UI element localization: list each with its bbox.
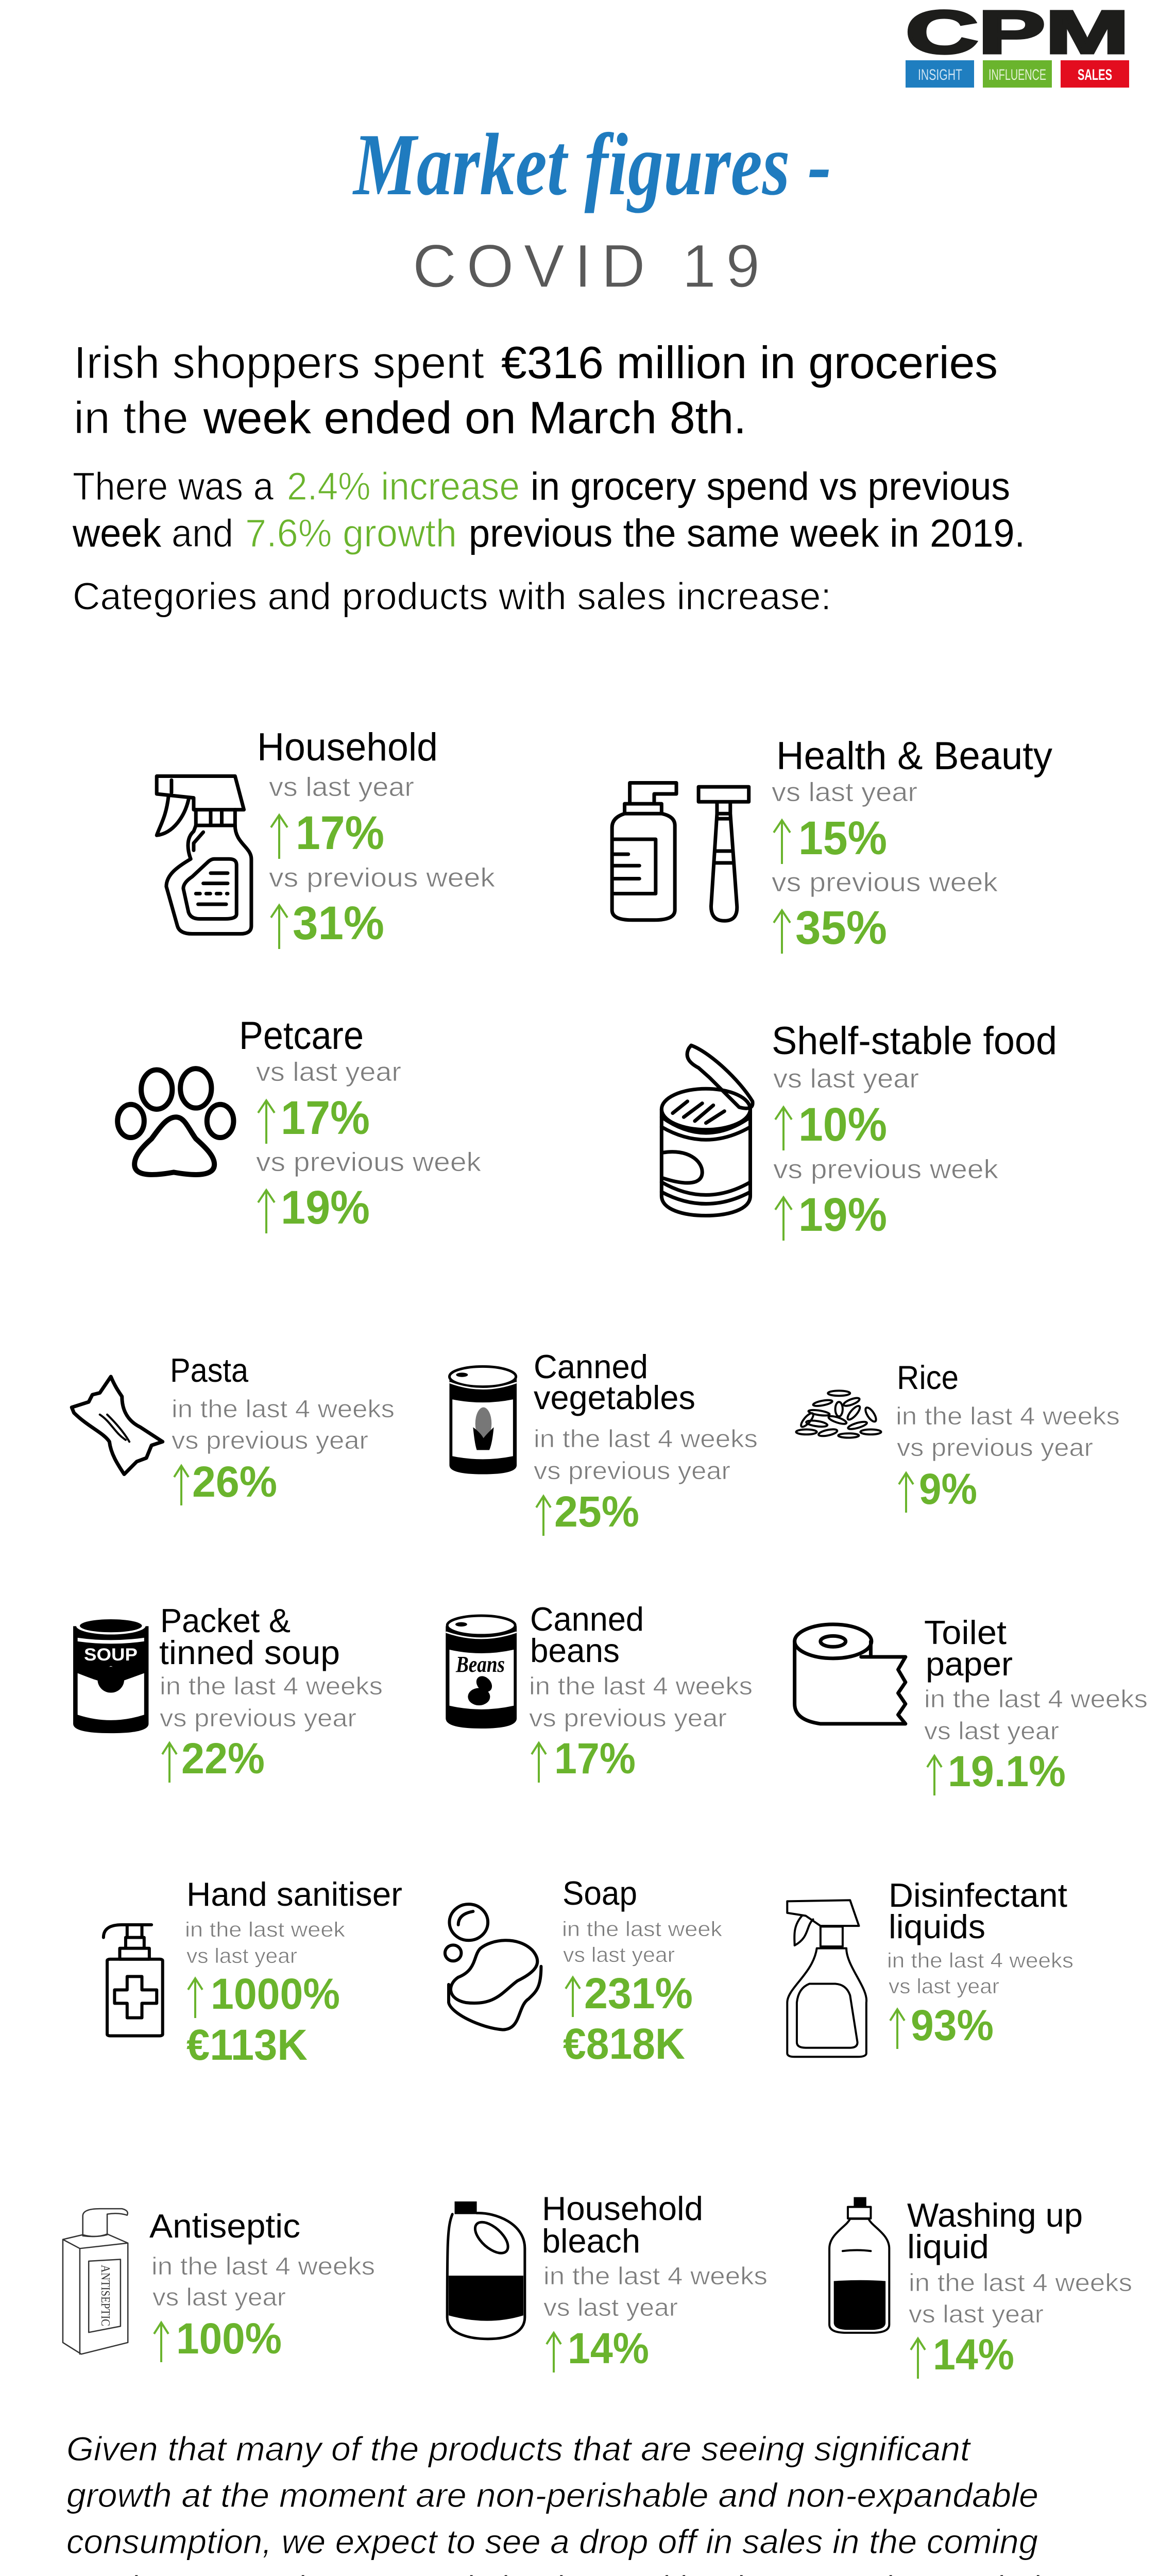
logo tile: insight: INSIGHT [918,66,962,83]
value: 17% [296,807,384,859]
value: 26% [192,1458,277,1506]
heading: Rice [897,1359,959,1396]
icon: antiseptic bottle [63,2209,128,2354]
logo tile: influence: INFLUENCE [988,66,1046,83]
value: 231% [584,1969,693,2018]
value: 10% [798,1098,887,1151]
heading: Washing up [907,2196,1083,2234]
arrow [258,1100,275,1144]
icon: corn can [449,1366,517,1475]
label: vs previous week [256,1147,482,1177]
label: vs previous year [172,1427,368,1454]
panel: hand sanitiser [104,1875,402,2069]
subtitle: COVID 19: COVID 19 [413,232,760,300]
panel: washing up liquid [829,2196,1132,2379]
arrow [911,2338,925,2379]
heading [924,1614,1013,1683]
label: vs last year [269,772,414,802]
arrow [775,1107,792,1150]
panel: soap [445,1874,723,2068]
value: 22% [181,1734,265,1783]
text block: growth summary: 2.4% increase [287,465,520,509]
heading: Household [542,2190,703,2227]
heading: Shelf-stable food [772,1019,1057,1063]
value: 9% [919,1465,977,1513]
value: €818K [563,2020,685,2068]
label: vs previous year [534,1458,730,1485]
heading: paper [926,1645,1013,1683]
panel: disinfectant liquids [787,1876,1073,2057]
panel: pasta [72,1351,395,1506]
arrow [774,910,790,954]
label: in the last week [185,1918,346,1941]
panel: canned vegetables [449,1348,758,1536]
panel: toilet paper [795,1614,1148,1795]
label: vs previous year [897,1434,1093,1462]
label: in the last 4 weeks [543,2263,768,2290]
text block: headline spend: in the [74,392,189,443]
value: 17% [281,1092,370,1144]
text block: growth summary [72,465,1025,555]
arrow [774,820,790,864]
label: vs last year [152,2284,286,2311]
label: vs last year [256,1057,401,1087]
panel: petcare [117,1014,482,1234]
label: vs previous year [529,1705,727,1732]
heading: Soap [563,1874,637,1912]
value: 19.1% [948,1747,1066,1795]
value: 19% [798,1189,887,1241]
icon: beans can [446,1616,517,1728]
label: in the last week [562,1917,723,1941]
text block: growth summary: in grocery spend vs previous [531,465,1010,509]
label: in the last 4 weeks [160,1673,383,1700]
logo tile: sales [1061,60,1129,88]
heading: Disinfectant [889,1876,1067,1914]
heading: Canned [530,1600,644,1638]
icon label: ANTISEPTIC: ANTISEPTIC [98,2265,112,2326]
value: 93% [911,2001,994,2049]
text block: growth summary: There was a [73,465,274,509]
heading: Household [257,725,438,769]
text block: headline spend: €316 million in groceries [501,337,998,388]
text block: outlook commentary: consumption, we expect to see a drop off in sales in the coming [66,2522,1038,2561]
heading: Health & Beauty [776,734,1052,778]
label: in the last 4 weeks [896,1403,1120,1430]
value: 31% [293,897,384,950]
icon: pump bottle and razor [612,783,749,921]
label: vs last year [563,1943,675,1967]
arrow [566,1977,580,2017]
text block: headline spend [74,337,998,443]
icon: soup can [73,1617,148,1733]
heading: Canned [534,1348,648,1385]
heading [534,1348,695,1416]
icon label: Beans: Beans [455,1652,505,1677]
panel: antiseptic [63,2207,375,2363]
text block: headline spend: Irish shoppers spent [74,337,484,388]
icon: dish liquid bottle [829,2197,889,2333]
value: 35% [795,902,887,954]
label: vs last year [772,777,917,807]
label: in the last 4 weeks [534,1426,758,1453]
arrow [162,1743,177,1783]
value: 14% [933,2330,1014,2379]
label: vs previous week [269,863,496,893]
panel: packet and tinned soup [73,1602,383,1783]
label: in the last 4 weeks [151,2253,375,2280]
label: vs previous year [160,1705,356,1732]
text block: outlook commentary [66,2430,1081,2576]
icon: opened can [661,1045,753,1216]
icon: spray bottle [157,776,251,934]
value: 1000% [211,1970,340,2018]
arrow [174,1466,189,1505]
icon: bleach bottle [447,2201,525,2339]
heading: liquids [889,1908,985,1945]
heading: Toilet [924,1614,1007,1651]
icon: soap and bubbles [445,1904,541,2030]
arrow [154,2323,168,2362]
heading [159,1602,340,1671]
label: vs last year [543,2294,678,2321]
arrow [258,1190,275,1233]
icon: toilet roll [795,1624,906,1724]
value: 17% [554,1734,636,1783]
icon: paw [117,1069,233,1175]
label: in the last 4 weeks [909,2269,1132,2297]
label: in the last 4 weeks [924,1686,1148,1713]
value: 25% [554,1487,639,1536]
icon: farfalle [72,1377,163,1475]
heading: Pasta [170,1351,249,1389]
label: vs last year [909,2301,1044,2328]
heading: vegetables [534,1379,695,1416]
icon: rice grains [796,1391,881,1438]
value: 14% [568,2324,649,2372]
label: vs last year [773,1064,919,1094]
text block: outlook commentary: growth at the moment are non-perishable and non-expandable [66,2476,1038,2514]
arrow [271,815,287,859]
logo tile: sales: SALES [1078,66,1112,83]
text block: growth summary: previous the same week in 2019. [469,512,1025,555]
text block: growth summary: 7.6% growth [245,512,457,555]
icon: spray bottle [787,1900,866,2057]
label: in the last 4 weeks [529,1673,753,1700]
arrow [775,1197,792,1241]
logo tile: influence [983,60,1052,88]
heading: categories with sales increase: Categories and products with sales increase: [73,575,831,618]
label: in the last 4 weeks [887,1948,1073,1972]
heading: bleach [542,2222,640,2260]
icon label: SOUP: SOUP [84,1645,138,1665]
text block: outlook commentary: Given that many of the products that are seeing significant [66,2430,971,2468]
text block: growth summary: and [172,512,233,555]
arrow [188,1978,202,2018]
text block: headline spend: week ended on March 8th. [203,392,746,443]
heading [907,2196,1083,2265]
arrow [547,2333,561,2372]
heading [889,1876,1067,1945]
panel: household bleach [447,2190,768,2372]
value: 19% [281,1181,370,1234]
label: vs last year [924,1718,1059,1745]
logo tile: insight [906,60,974,88]
panel: health and beauty [612,734,1052,954]
logo: CPM [906,0,1129,88]
heading: liquid [907,2228,989,2265]
value: 15% [798,812,887,865]
arrow [899,1473,913,1513]
label: vs last year [186,1944,297,1968]
label: vs previous week [772,868,998,897]
heading [542,2190,703,2260]
logo wordmark: CPM [906,0,1129,66]
heading: Petcare [239,1014,364,1058]
heading: Packet & [160,1602,291,1639]
label: vs last year [889,1974,999,1998]
heading: beans [530,1632,620,1669]
arrow [536,1496,551,1536]
arrow [532,1743,546,1783]
arrow [890,2009,905,2049]
heading: tinned soup [159,1634,340,1671]
panel: household [157,725,496,950]
value: 100% [176,2314,282,2363]
heading [530,1600,644,1669]
value: €113K [186,2021,308,2069]
text block: growth summary: week [72,512,162,555]
panel: rice [796,1359,1120,1513]
arrow [271,905,287,949]
heading: Hand sanitiser [186,1875,402,1913]
panel: canned beans [446,1600,753,1783]
panel: shelf-stable food [661,1019,1057,1241]
icon: sanitiser dispenser [104,1925,163,2036]
title: Market figures - [352,116,831,214]
label: vs previous week [773,1155,999,1184]
heading: Antiseptic [149,2207,300,2245]
label: in the last 4 weeks [172,1396,395,1423]
arrow [927,1756,942,1795]
